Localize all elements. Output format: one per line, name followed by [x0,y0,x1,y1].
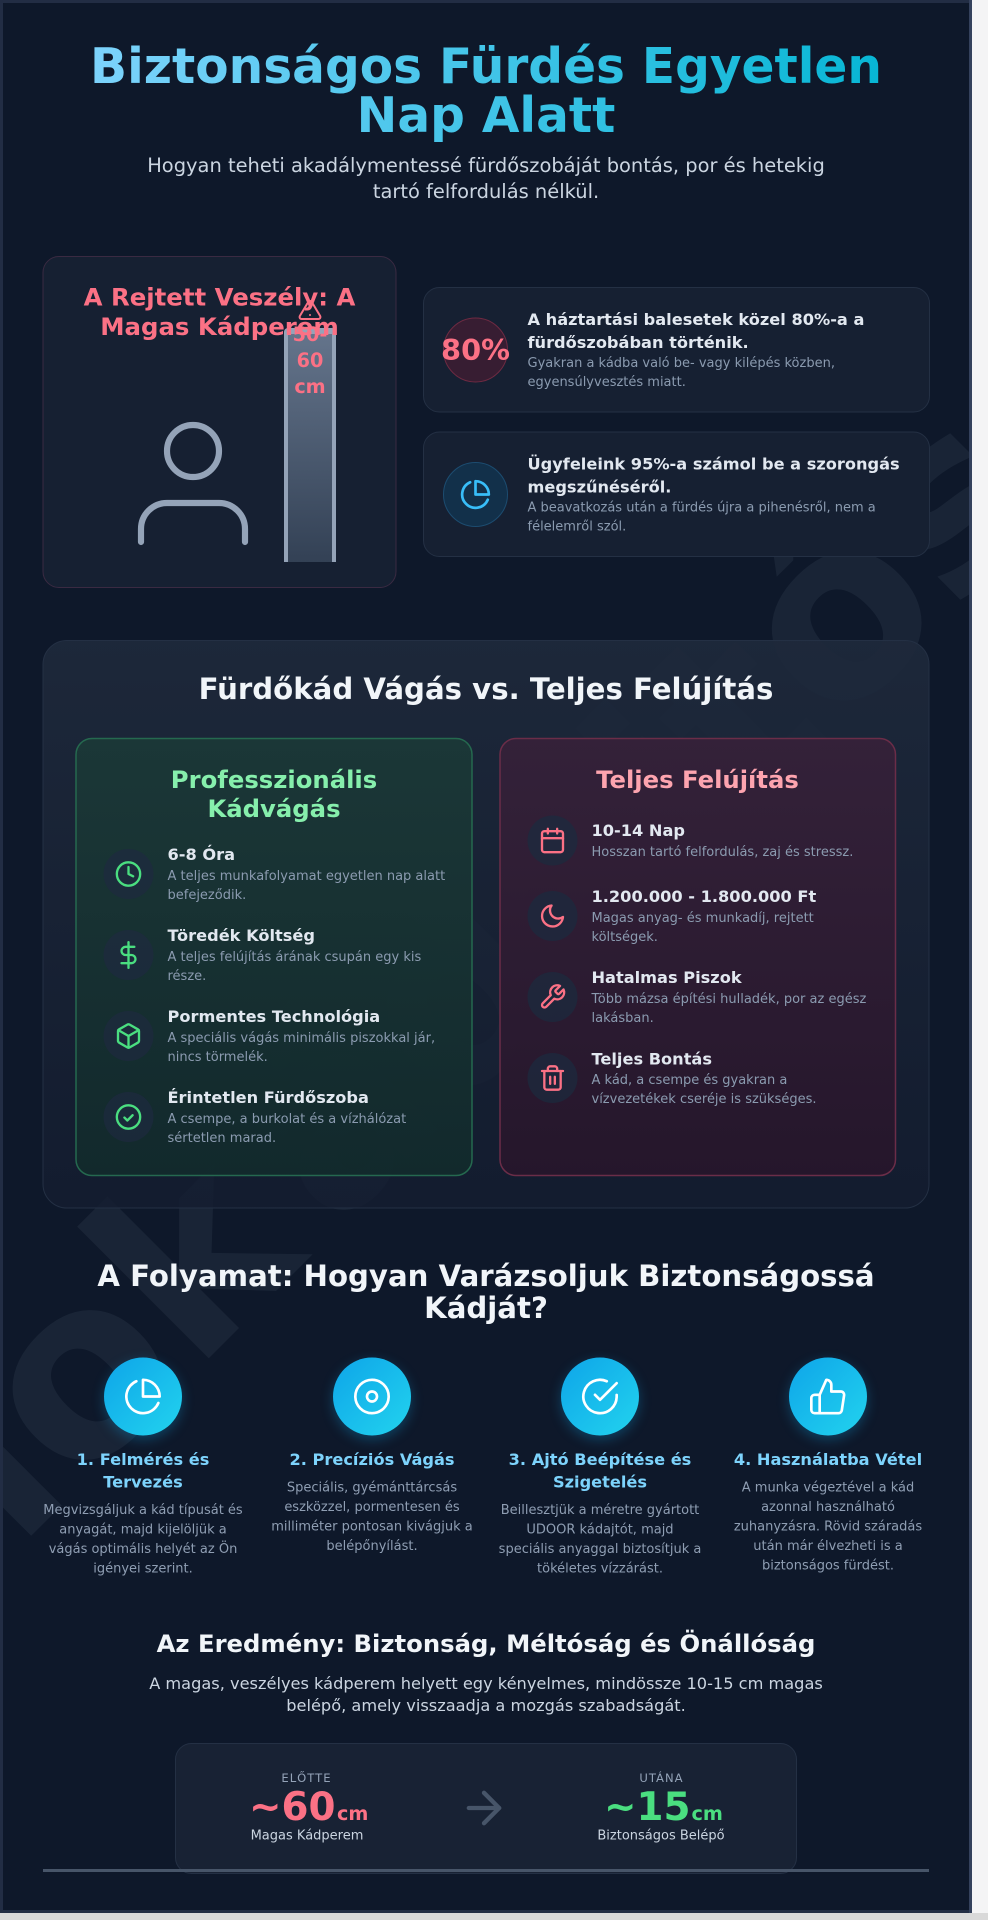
stat text: A háztartási balesetek közel 80%-a a [528,310,864,329]
step 1: 1. Felmérés és [77,1450,209,1469]
panel: full renovation [500,738,896,1176]
item: dust free: Pormentes Technológia [168,1007,380,1026]
stat text: megszűnéséről. [528,478,671,496]
stat text: Ügyfeleink 95%-a számol be a szorongás [528,454,900,474]
item: duration: 10-14 Nap [592,821,685,840]
icon circle [444,318,508,382]
icon: warning triangle [300,301,320,319]
process heading: A Folyamat: Hogyan Varázsoljuk Biztonságossá [97,1259,875,1293]
item: cost: Töredék Költség [168,926,315,945]
comparison heading: Fürdőkád Vágás vs. Teljes Felújítás [199,672,773,706]
before column: ~60 [249,1785,336,1830]
footer rule [43,1869,929,1872]
step 4 [734,1358,922,1574]
heading: Teljes Felújítás [596,765,799,794]
item: demolition: vízvezetékek cseréje is szükséges. [592,1092,816,1107]
step 3: 3. Ajtó Beépítése és [509,1450,691,1469]
step 4: után már élvezheti is a [753,1539,903,1554]
before column [249,1770,368,1844]
item: dust free: A speciális vágás minimális piszokkal jár, [168,1031,435,1046]
step 1: anyagát, majd kijelöljük a [59,1522,227,1538]
item: dirt: Hatalmas Piszok [592,968,743,987]
result paragraph: A magas, veszélyes kádperem helyett egy kényelmes, mindössze 10-15 cm magas [149,1674,823,1693]
result paragraph [149,1674,823,1715]
step 3: tökéletes vízzárást. [537,1562,663,1576]
item: time: 6-8 Óra [168,845,235,864]
item: time: A teljes munkafolyamat egyetlen nap alatt [168,869,445,884]
step 3: Szigetelés [553,1472,647,1492]
step 2 [271,1358,473,1554]
step 2: milliméter pontosan kivágjuk a [271,1520,473,1534]
item: dirt [528,968,866,1026]
stat text [528,310,864,390]
subtitle [147,154,825,203]
icon: pie chart [462,481,489,508]
item: demolition [528,1050,816,1107]
after column: cm [692,1802,723,1825]
item: cost [104,926,421,984]
watermark text [3,434,969,1536]
stat text: egyensúlyvesztés miatt. [528,375,686,390]
stat text: fürdőszobában történik. [528,333,749,352]
item: dirt: Több mázsa építési hulladék, por az egész [590,992,866,1007]
item: price: 1.200.000 - 1.800.000 Ft [592,887,816,906]
item: untouched: Érintetlen Fürdőszoba [168,1088,369,1107]
step 4: biztonságos fürdést. [762,1558,894,1574]
step 4: A munka végeztével a kád [742,1480,914,1496]
item: time [104,845,445,903]
heading: Professzionális [171,765,377,794]
step 4: azonnal használható [761,1500,895,1515]
item: dust free: nincs törmelék. [168,1050,268,1065]
bar label: 60 [297,349,323,372]
item: dust free [104,1007,435,1065]
panel: comparison [43,640,929,1208]
after column: ~15 [604,1785,690,1830]
item: demolition: A kád, a csempe és gyakran a [592,1073,787,1088]
bar label: 50- [293,323,327,346]
before column: cm [337,1802,368,1825]
item: price: költségek. [592,930,658,945]
item: duration: Hosszan tartó felfordulás, zaj és stressz. [592,845,853,860]
title: Biztonságos Fürdés Egyetlen [90,39,882,95]
result paragraph: belépő, amely visszaadja a mozgás szabadságát. [286,1696,686,1715]
icon circle [444,462,508,526]
stat card: 80 percent [424,288,930,412]
bar label: cm [294,375,326,398]
subtitle: tartó felfordulás nélkül. [373,180,599,203]
bar label [293,323,327,398]
before/after box [176,1744,796,1874]
stat text: félelemről szól. [528,520,626,534]
after column: UTÁNA [639,1770,684,1785]
panel heading [84,282,356,341]
step 2: belépőnyílást. [326,1539,418,1554]
item: time: befejeződik. [168,888,246,903]
step 4: 4. Használatba Vétel [734,1450,922,1469]
item: untouched [104,1088,406,1146]
stat text [528,454,900,534]
before column: Magas Kádperem [251,1828,363,1844]
step 4: zuhanyzásra. Rövid száradás [734,1520,922,1534]
step 1 [43,1358,243,1576]
step 1: Tervezés [103,1472,183,1492]
step 3: speciális anyaggal biztosítjuk a [499,1542,701,1557]
item: price [528,887,816,945]
stat text: A beavatkozás után a fürdés újra a pihenésről, nem a [528,500,876,516]
stat value: 80% [441,333,510,367]
after column [597,1770,725,1844]
before column: ELŐTTE [281,1770,332,1785]
stat text: Gyakran a kádba való be- vagy kilépés közben, [528,356,835,371]
item: price: Magas anyag- és munkadíj, rejtett [592,911,814,926]
step 2: eszközzel, pormentesen és [284,1500,460,1515]
result heading: Az Eredmény: Biztonság, Méltóság és Önállóság [157,1628,815,1658]
title [90,39,882,144]
process heading [97,1259,875,1325]
step 2: 2. Precíziós Vágás [289,1450,455,1469]
step 3: UDOOR kádajtót, majd [526,1522,674,1538]
heading [171,765,377,823]
tub wall bar [284,328,336,562]
item: duration [528,816,853,866]
heading: Kádvágás [207,794,341,823]
title: Nap Alatt [357,88,615,144]
stat card: 95 percent [424,432,930,556]
subtitle: Hogyan teheti akadálymentessé fürdőszobáját bontás, por és hetekig [147,154,825,177]
step 1: igényei szerint. [93,1562,193,1576]
item: untouched: A csempe, a burkolat és a vízhálózat [168,1112,406,1127]
item: cost: része. [168,969,206,984]
step 1: vágás optimális helyét az Ön [49,1540,237,1557]
after column: Biztonságos Belépő [597,1828,725,1844]
panel heading: A Rejtett Veszély: A [84,282,356,312]
process heading: Kádját? [424,1291,548,1325]
icon: person [141,425,245,542]
arrow [469,1793,499,1823]
item: cost: A teljes felújítás árának csupán egy kis [168,950,421,965]
item: demolition: Teljes Bontás [592,1050,712,1068]
item: untouched: sértetlen marad. [168,1131,276,1146]
panel: bath cutting [76,738,472,1176]
item: dirt: lakásban. [592,1011,654,1026]
step 1: Megvizsgáljuk a kád típusát és [43,1503,243,1518]
step 2: Speciális, gyémánttárcsás [287,1480,457,1496]
panel: hidden danger [43,256,396,588]
step 3: Beillesztjük a méretre gyártott [501,1503,699,1518]
panel heading: Magas Kádperem [100,312,339,341]
step 3 [499,1358,701,1576]
